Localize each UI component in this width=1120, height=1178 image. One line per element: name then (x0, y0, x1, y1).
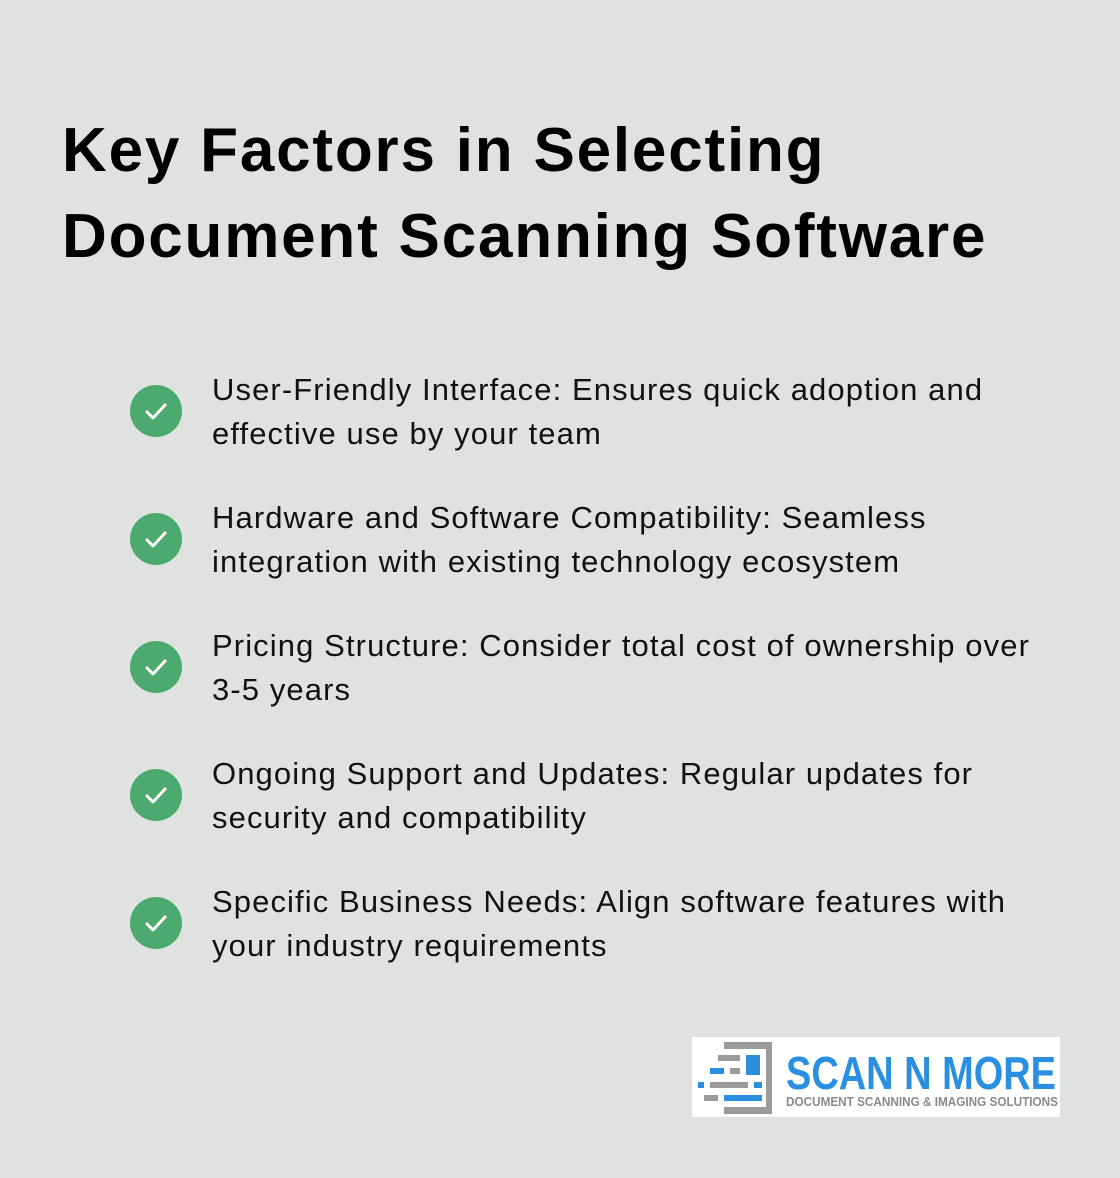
text: your industry requirements (212, 928, 608, 963)
icon: check (130, 897, 182, 949)
item: support (130, 756, 973, 835)
icon: check (130, 385, 182, 437)
logo: scan n more (692, 1037, 1060, 1117)
item: user-friendly interface (130, 372, 983, 451)
icon: check (130, 769, 182, 821)
title: Key Factors in Selecting (62, 116, 825, 185)
text (212, 756, 973, 835)
item: pricing (130, 628, 1030, 707)
text (212, 628, 1030, 707)
item: compatibility (130, 500, 927, 579)
text: 3-5 years (212, 672, 351, 707)
text: Hardware and Software Compatibility: Seamless (212, 500, 927, 535)
text: Ongoing Support and Updates: Regular updates for (212, 756, 973, 791)
icon: check (130, 513, 182, 565)
icon: scanner bars (698, 1042, 772, 1114)
text: security and compatibility (212, 800, 587, 835)
text: Pricing Structure: Consider total cost of ownership over (212, 628, 1030, 663)
text (212, 884, 1006, 963)
icon: check (130, 641, 182, 693)
title (62, 116, 987, 271)
text: User-Friendly Interface: Ensures quick adoption and (212, 372, 983, 407)
text: effective use by your team (212, 416, 602, 451)
title: Document Scanning Software (62, 202, 987, 271)
text (212, 500, 927, 579)
text: integration with existing technology ecosystem (212, 544, 900, 579)
text (212, 372, 983, 451)
item: business needs (130, 884, 1006, 963)
text: Specific Business Needs: Align software features with (212, 884, 1006, 919)
